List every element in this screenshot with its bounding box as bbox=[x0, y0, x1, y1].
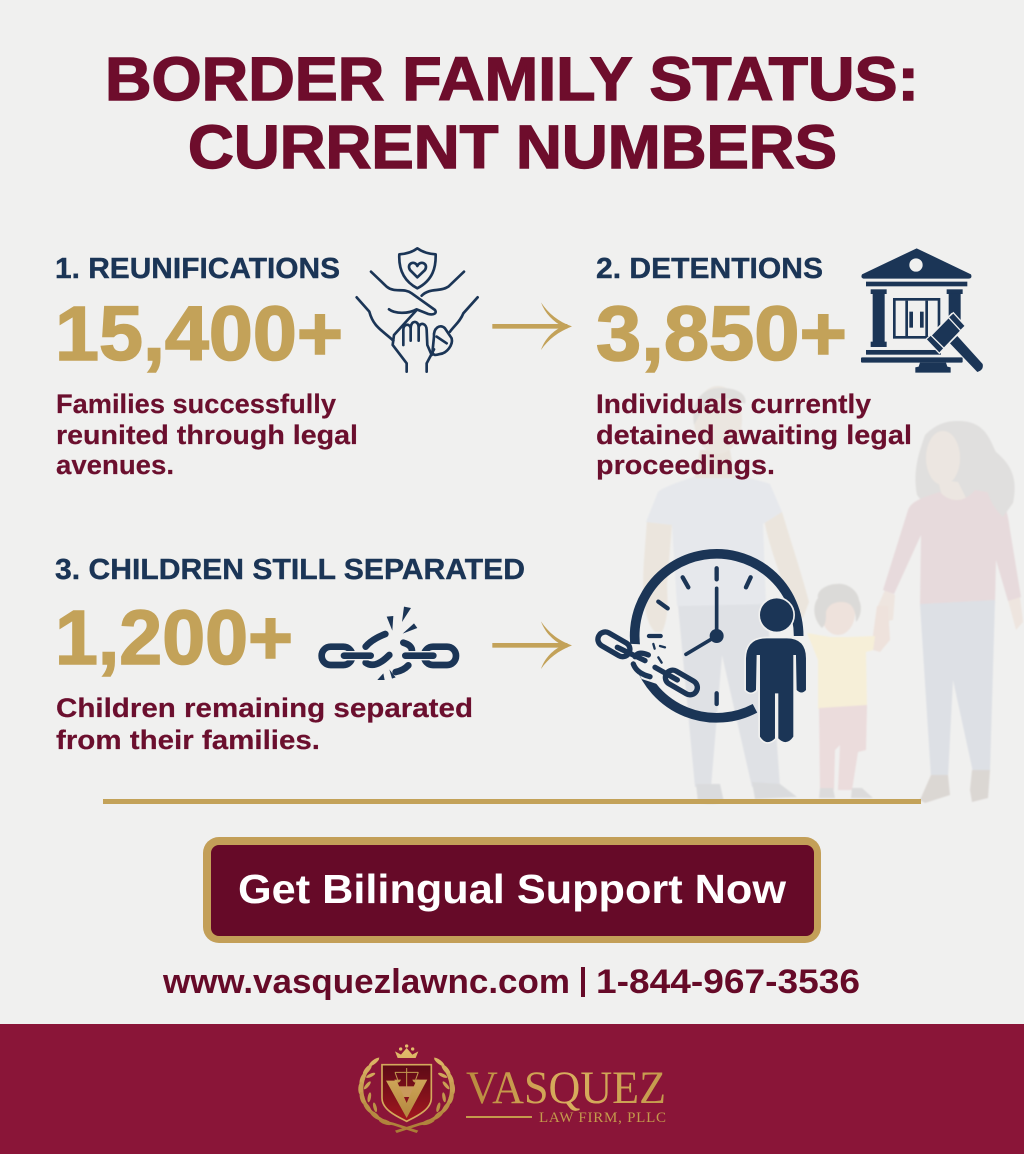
description: reunifications: avenues. bbox=[56, 450, 174, 480]
icon: clock with child and broken chain bbox=[595, 554, 806, 742]
title: CURRENT NUMBERS bbox=[188, 113, 837, 181]
heading: children still separated: 3. CHILDREN STILL SEPARATED bbox=[55, 554, 525, 586]
contact line: 1-844-967-3536 bbox=[596, 963, 860, 1001]
contact line bbox=[162, 963, 860, 1001]
call-to-action button bbox=[203, 837, 821, 943]
icon: courthouse and gavel bbox=[861, 248, 983, 373]
description: children: Children remaining separated bbox=[56, 693, 473, 723]
divider: gold rule bbox=[103, 799, 921, 804]
description: reunifications bbox=[56, 389, 358, 480]
description: detentions: Individuals currently bbox=[596, 389, 871, 419]
call-to-action button: Get Bilingual Support Now bbox=[238, 866, 786, 912]
number: 15,400+: 15,400+ bbox=[55, 291, 343, 377]
V monogram bbox=[386, 1080, 427, 1118]
icon: hands and shield bbox=[357, 248, 478, 372]
logo wordmark: VASQUEZ bbox=[466, 1062, 666, 1114]
laurel bbox=[358, 1057, 418, 1133]
scales bbox=[395, 1068, 418, 1088]
man silhouette bbox=[643, 386, 809, 804]
heading: detentions: 2. DETENTIONS bbox=[596, 253, 823, 285]
shield bbox=[382, 1065, 431, 1121]
heading: reunifications: 1. REUNIFICATIONS bbox=[55, 253, 340, 285]
description: reunifications: reunited through legal bbox=[56, 420, 358, 450]
footer band bbox=[0, 1024, 1024, 1154]
background family silhouette bbox=[643, 386, 1023, 804]
arrow: reunifications to detentions bbox=[492, 302, 572, 350]
description: reunifications: Families successfully bbox=[56, 389, 336, 419]
crown bbox=[395, 1044, 418, 1058]
child silhouette bbox=[807, 584, 890, 798]
description: children bbox=[56, 693, 473, 755]
child figure bbox=[746, 598, 806, 742]
contact line: www.vasquezlawnc.com bbox=[162, 963, 570, 1001]
logo: Vasquez Law Firm: LAW FIRM, PLLC bbox=[539, 1110, 666, 1126]
title bbox=[105, 45, 919, 181]
panel: detentions bbox=[596, 248, 983, 480]
logo emblem bbox=[358, 1044, 456, 1133]
number: 3,850+: 3,850+ bbox=[596, 291, 847, 377]
woman silhouette bbox=[877, 421, 1023, 803]
icon: broken chain bbox=[322, 607, 456, 680]
panel: reunifications bbox=[55, 248, 478, 480]
description: children: from their families. bbox=[56, 725, 320, 755]
chain bbox=[595, 629, 700, 698]
arrow: children to clock bbox=[492, 621, 572, 669]
number: 1,200+: 1,200+ bbox=[55, 595, 293, 681]
panel: children still separated bbox=[55, 554, 806, 755]
description: detentions bbox=[596, 389, 912, 480]
logo: Vasquez Law Firm bbox=[358, 1044, 666, 1133]
title: BORDER FAMILY STATUS: bbox=[105, 45, 919, 113]
description: detentions: proceedings. bbox=[596, 450, 775, 480]
description: detentions: detained awaiting legal bbox=[596, 420, 912, 450]
